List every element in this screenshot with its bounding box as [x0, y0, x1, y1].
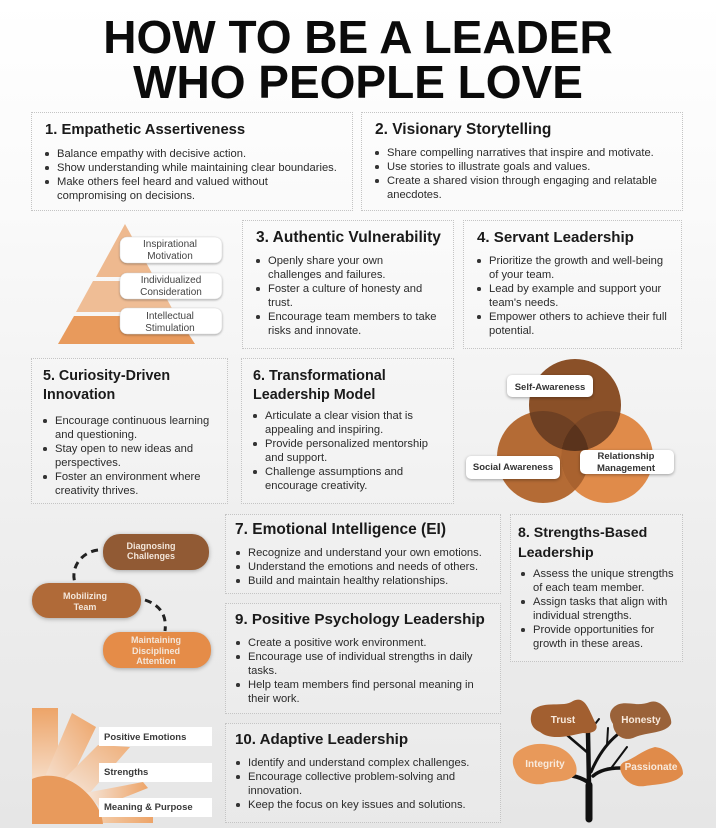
heading: 9: 9. Positive Psychology Leadership — [235, 611, 485, 628]
text block: 6 bullets: Provide personalized mentorship — [265, 438, 428, 450]
text block: 3 bullets: challenges and failures. — [268, 269, 386, 281]
title — [103, 11, 613, 108]
text block: 2 bullets: Use stories to illustrate goals and values. — [387, 161, 590, 173]
panel: 1. Empathetic Assertiveness — [31, 112, 353, 211]
chart: emotional intelligence venn diagram: Social Awareness — [473, 462, 553, 473]
chart: leadership pyramid: Motivation — [147, 251, 193, 262]
title: WHO PEOPLE LOVE — [133, 56, 583, 108]
heading: 6 — [253, 368, 386, 403]
chart: emotional intelligence venn diagram — [464, 359, 676, 503]
heading: 6: Leadership Model — [253, 387, 375, 403]
text block: 4 bullets: Prioritize the growth and well-being — [489, 255, 663, 267]
title: HOW TO BE A LEADER — [103, 11, 613, 63]
text block: 5 bullets: perspectives. — [55, 457, 121, 469]
chart: leadership values tree: Honesty — [621, 715, 661, 726]
chart: leadership pyramid: Inspirational — [143, 239, 197, 250]
heading: 4: 4. Servant Leadership — [477, 229, 634, 246]
chart: adaptive leadership cycle: Team — [74, 602, 96, 612]
chart: positive psychology sunburst: Meaning & Purpose — [104, 802, 193, 813]
text block: 2 bullets — [375, 147, 657, 201]
text block: 4 bullets — [477, 255, 667, 337]
chart: adaptive leadership cycle: Maintaining — [131, 635, 181, 645]
heading: 1: 1. Empathetic Assertiveness — [45, 122, 245, 138]
text block: 3 bullets: risks and innovate. — [268, 325, 361, 337]
text block: 9 bullets — [236, 637, 474, 705]
text block: 1 bullets: Balance empathy with decisive action. — [57, 148, 246, 160]
text block: 8 bullets — [521, 568, 674, 650]
text block: 1 bullets — [45, 148, 337, 202]
text block: 8 bullets: Provide opportunities for — [533, 624, 654, 636]
text block: 5 bullets: Encourage continuous learning — [55, 415, 209, 427]
text block: 4 bullets: Empower others to achieve their full — [489, 311, 667, 323]
chart: leadership values tree: Trust — [551, 715, 576, 726]
text block: 3 bullets: Openly share your own — [268, 255, 383, 267]
text block: 4 bullets: of your team. — [489, 269, 554, 281]
text block: 5 bullets: Stay open to new ideas and — [55, 443, 193, 455]
chart: adaptive leadership cycle: Diagnosing — [126, 541, 176, 551]
chart: adaptive leadership cycle: Challenges — [127, 551, 175, 561]
text block: 1 bullets: Make others feel heard and valued without — [57, 176, 268, 188]
text block: 6 bullets: and support. — [265, 452, 327, 464]
chart: adaptive leadership cycle: Attention — [136, 656, 176, 666]
text block: 6 bullets: appealing and inspiring. — [265, 424, 383, 436]
text block: 8 bullets: growth in these areas. — [533, 638, 643, 650]
text block: 6 bullets: Articulate a clear vision that is — [265, 410, 413, 422]
text block: 10 bullets: Identify and understand complex challenges. — [248, 757, 469, 769]
text block: 9 bullets: tasks. — [248, 665, 277, 677]
panel: 3. Authentic Vulnerability — [242, 220, 454, 349]
text block: 4 bullets: Lead by example and support your — [489, 283, 661, 295]
text block: 9 bullets: their work. — [248, 693, 300, 705]
panel: 8. Strengths-Based Leadership — [510, 514, 683, 662]
text block: 10 bullets: innovation. — [248, 785, 302, 797]
text block: 3 bullets: Foster a culture of honesty and — [268, 283, 422, 295]
text block: 7 bullets — [236, 547, 482, 587]
text block: 7 bullets: Build and maintain healthy relationships. — [248, 575, 448, 587]
text block: 10 bullets: Keep the focus on key issues and solutions. — [248, 799, 466, 811]
text block: 4 bullets: team's needs. — [489, 297, 558, 309]
text block: 7 bullets: Understand the emotions and needs of others. — [248, 561, 478, 573]
text block: 9 bullets: Create a positive work environment. — [248, 637, 426, 649]
chart: emotional intelligence venn diagram: Relationship — [597, 451, 655, 462]
text block: 8 bullets: Assign tasks that align with — [533, 596, 667, 608]
panel: 4. Servant Leadership — [463, 220, 682, 349]
text block: 10 bullets — [236, 757, 469, 811]
text block: 1 bullets: compromising on decisions. — [57, 190, 195, 202]
panel: 10. Adaptive Leadership — [225, 723, 501, 823]
heading: 2: 2. Visionary Storytelling — [375, 121, 551, 138]
text block: 2 bullets: anecdotes. — [387, 189, 442, 201]
text block: 9 bullets: Help team members find personal meaning in — [248, 679, 474, 691]
text block: 6 bullets: encourage creativity. — [265, 480, 367, 492]
text block: 5 bullets — [43, 415, 209, 497]
chart: leadership pyramid: Individualized — [141, 275, 201, 286]
text block: 3 bullets: trust. — [268, 297, 293, 309]
chart: positive psychology sunburst — [32, 708, 212, 824]
chart: leadership pyramid: Intellectual — [146, 311, 194, 322]
heading: 5 — [43, 368, 170, 403]
text block: 8 bullets: of each team member. — [533, 582, 644, 594]
text block: 5 bullets: Foster an environment where — [55, 471, 201, 483]
chart: adaptive leadership cycle: Mobilizing — [63, 591, 107, 601]
chart: leadership values tree — [512, 700, 683, 822]
text block: 3 bullets: Encourage team members to take — [268, 311, 437, 323]
chart: positive psychology sunburst: Strengths — [104, 767, 148, 778]
heading: 8: Leadership — [518, 545, 594, 561]
chart: emotional intelligence venn diagram: Self-Awareness — [515, 382, 585, 393]
text block: 7 bullets: Recognize and understand your own emotions. — [248, 547, 482, 559]
panel: 9. Positive Psychology Leadership — [225, 603, 501, 714]
heading: 3: 3. Authentic Vulnerability — [256, 229, 441, 246]
chart: adaptive leadership cycle: Disciplined — [132, 646, 180, 656]
text block: 10 bullets: Encourage collective problem-solving and — [248, 771, 455, 783]
heading: 8: 8. Strengths-Based — [518, 525, 647, 541]
text block: 2 bullets: Share compelling narratives that inspire and motivate. — [387, 147, 654, 159]
chart: leadership values tree: Passionate — [625, 762, 678, 773]
text block: 3 bullets — [256, 255, 437, 337]
chart: leadership values tree: Integrity — [525, 759, 565, 770]
text block: 2 bullets: Create a shared vision through engaging and relatable — [387, 175, 657, 187]
text block: 6 bullets — [253, 410, 428, 492]
text block: 1 bullets: Show understanding while maintaining clear boundaries. — [57, 162, 337, 174]
chart: emotional intelligence venn diagram: Management — [597, 463, 656, 474]
chart: leadership pyramid: Consideration — [140, 287, 202, 298]
chart: adaptive leadership cycle — [30, 532, 214, 672]
panel: 7. Emotional Intelligence (EI) — [225, 514, 501, 594]
panel: 6. Transformational Leadership Model — [241, 358, 454, 504]
heading: 10: 10. Adaptive Leadership — [235, 731, 408, 748]
heading: 7: 7. Emotional Intelligence (EI) — [235, 521, 446, 538]
heading: 6: 6. Transformational — [253, 368, 386, 384]
heading: 5: Innovation — [43, 387, 115, 403]
text block: 6 bullets: Challenge assumptions and — [265, 466, 403, 478]
text block: 4 bullets: potential. — [489, 325, 534, 337]
heading: 5: 5. Curiosity-Driven — [43, 368, 170, 384]
text block: 8 bullets: Assess the unique strengths — [533, 568, 674, 580]
chart: positive psychology sunburst: Positive Emotions — [104, 732, 186, 743]
panel: 2. Visionary Storytelling — [361, 112, 683, 211]
chart: leadership pyramid — [58, 224, 224, 344]
text block: 5 bullets: creativity thrives. — [55, 485, 138, 497]
heading: 8 — [518, 525, 647, 561]
chart: leadership pyramid: Stimulation — [145, 323, 195, 334]
text block: 5 bullets: and questioning. — [55, 429, 137, 441]
text block: 8 bullets: individual strengths. — [533, 610, 632, 622]
panel: 5. Curiosity-Driven Innovation — [31, 358, 228, 504]
text block: 9 bullets: Encourage use of individual strengths in daily — [248, 651, 473, 663]
